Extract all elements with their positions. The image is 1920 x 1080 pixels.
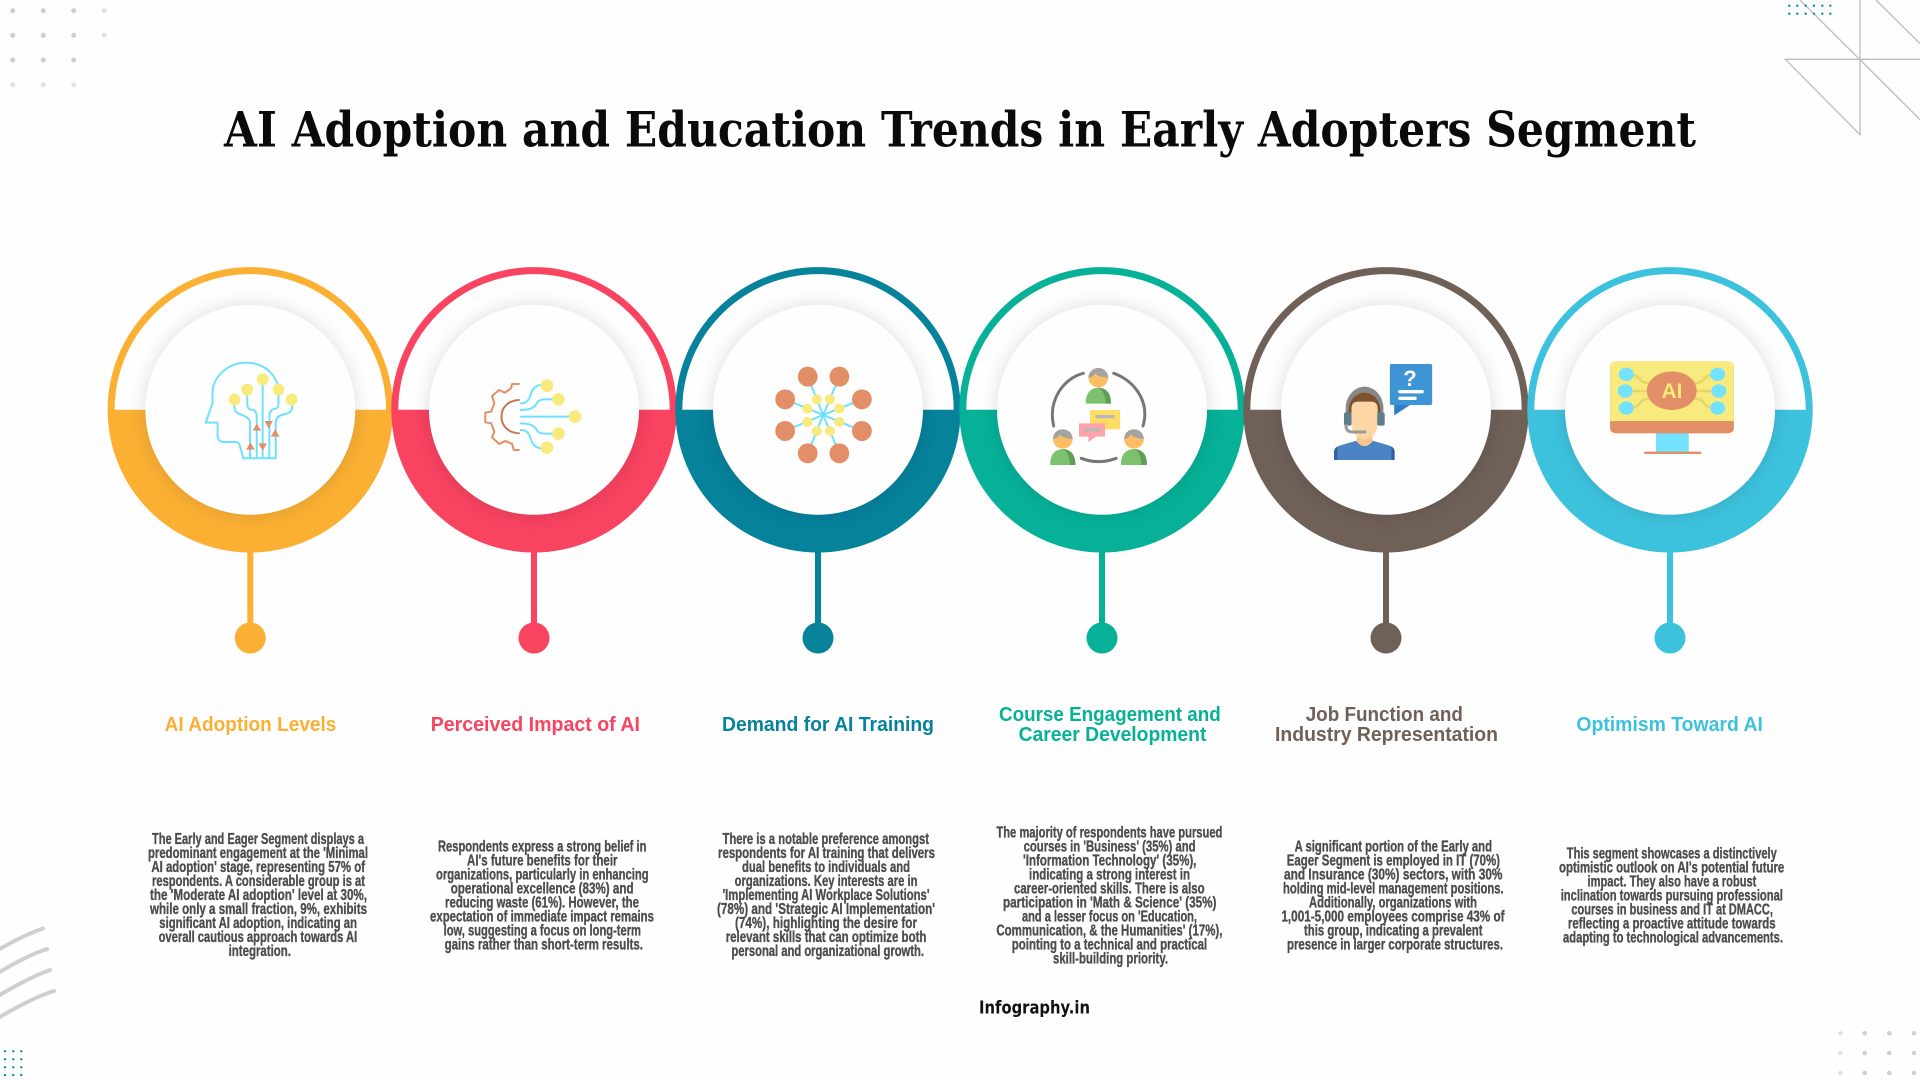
text block: optimism description: This segment showcases a distinctively xyxy=(1567,845,1777,862)
text block: perceived impact description: organizations, particularly in enhancing xyxy=(436,866,649,883)
decoration: bottom-left teal dots xyxy=(4,1050,22,1076)
connector: red stem and dot xyxy=(518,552,550,654)
text block: training demand description: relevant skills that can optimize both xyxy=(726,929,926,946)
text block: perceived impact description: gains rather than short-term results. xyxy=(445,936,643,953)
decoration: bottom-left curved strokes xyxy=(0,928,54,1018)
ring: red xyxy=(391,267,677,552)
ring: teal xyxy=(675,267,961,552)
text block: AI adoption description: The Early and Eager Segment displays a xyxy=(152,831,364,848)
connector: brown stem and dot xyxy=(1370,552,1402,654)
text block: training demand description: (74%), highlighting the desire for xyxy=(735,915,917,932)
text block: AI adoption description: the 'Moderate AI adoption' level at 30%, xyxy=(150,887,367,904)
panel: course engagement and career development xyxy=(959,267,1245,967)
text block: job function description: this group, indicating a prevalent xyxy=(1304,922,1482,939)
heading: Course Engagement and Career Development xyxy=(999,703,1221,746)
heading: Perceived Impact of AI: Perceived Impact of AI xyxy=(431,713,640,736)
text block: training demand description xyxy=(717,831,935,960)
text block: course engagement description: skill-building priority. xyxy=(1053,950,1168,967)
decoration: bottom-right dot grid xyxy=(1838,1031,1916,1075)
panel: demand for AI training xyxy=(675,267,961,960)
text block: training demand description: dual benefits to individuals and xyxy=(742,859,910,876)
text block: AI adoption description xyxy=(148,831,368,960)
text block: job function description xyxy=(1281,838,1505,953)
icon: support agent with question bubble: ? xyxy=(1403,366,1417,391)
panel: optimism toward AI xyxy=(1527,267,1813,946)
text block: job function description: holding mid-level management positions. xyxy=(1283,880,1504,897)
text block: AI adoption description: AI adoption' stage, representing 57% of xyxy=(151,859,366,876)
text block: AI adoption description: significant AI adoption, indicating an xyxy=(159,915,357,932)
text block: job function description: Eager Segment is employed in IT (70%) xyxy=(1287,852,1500,869)
text block: job function description: presence in larger corporate structures. xyxy=(1287,936,1503,953)
decoration: top-left dot grid xyxy=(10,8,107,87)
title: AI Adoption and Education Trends in Early Adopters Segment xyxy=(223,101,1696,159)
heading: Job Function and Industry Representation xyxy=(1275,703,1498,746)
text block: course engagement description: indicating a strong interest in xyxy=(1029,866,1190,883)
text block: course engagement description: career-oriented skills. There is also xyxy=(1014,880,1205,897)
ring: orange xyxy=(108,267,393,552)
text block: optimism description: impact. They also have a robust xyxy=(1588,873,1756,890)
heading: Job Function and Industry Representation: Industry Representation xyxy=(1275,723,1498,746)
text block: course engagement description: 'Information Technology' (35%), xyxy=(1023,852,1196,869)
panel: AI adoption levels xyxy=(108,267,393,960)
text block: optimism description: inclination towards pursuing professional xyxy=(1561,887,1783,904)
text block: perceived impact description: expectation of immediate impact remains xyxy=(430,908,654,925)
text block: training demand description: There is a notable preference amongst xyxy=(722,831,929,848)
text block: training demand description: personal and organizational growth. xyxy=(731,943,924,960)
icon: AI monitor xyxy=(1610,361,1734,454)
text block: perceived impact description: operational excellence (83%) and xyxy=(451,880,634,897)
ring: cyan xyxy=(1527,267,1813,552)
connector: teal stem and dot xyxy=(802,552,834,654)
text block: course engagement description: courses in 'Business' (35%) and xyxy=(1024,838,1196,855)
connector: orange stem and dot xyxy=(235,552,266,654)
text block: course engagement description: pointing to a technical and practical xyxy=(1012,936,1207,953)
text block: perceived impact description xyxy=(430,838,654,953)
icon: gear with network xyxy=(485,379,581,454)
decoration: top-right teal dots xyxy=(1788,4,1832,15)
text block: course engagement description: Communication, & the Humanities' (17%), xyxy=(996,922,1222,939)
icon: three people discussing xyxy=(1050,368,1147,465)
icon: radial network xyxy=(775,367,872,463)
ring: brown xyxy=(1243,267,1529,552)
heading: Course Engagement and Career Development: Career Development xyxy=(1019,723,1207,746)
text block: perceived impact description: AI's future benefits for their xyxy=(467,852,618,869)
icon: support agent with question bubble xyxy=(1334,364,1432,460)
text block: perceived impact description: Respondents express a strong belief in xyxy=(438,838,646,855)
decoration: top-right geometric lines xyxy=(1785,0,1920,135)
text block: training demand description: organizations. Key interests are in xyxy=(735,873,918,890)
ring: green xyxy=(959,267,1245,552)
text block: perceived impact description: low, suggesting a focus on long-term xyxy=(444,922,641,939)
text block: optimism description xyxy=(1559,845,1785,946)
text block: optimism description: optimistic outlook on AI's potential future xyxy=(1559,859,1785,876)
text block: job function description: and Insurance (30%) sectors, with 30% xyxy=(1284,866,1503,883)
heading: Course Engagement and Career Development: Course Engagement and xyxy=(999,703,1221,726)
text block: perceived impact description: reducing waste (61%). However, the xyxy=(445,894,639,911)
text block: optimism description: adapting to technological advancements. xyxy=(1563,929,1783,946)
text block: AI adoption description: while only a small fraction, 9%, exhibits xyxy=(149,901,367,918)
text block: job function description: A significant portion of the Early and xyxy=(1295,838,1492,855)
text block: training demand description: respondents for AI training that delivers xyxy=(718,845,935,862)
icon: AI monitor: AI xyxy=(1662,380,1682,403)
panel: job function and industry representation xyxy=(1243,267,1529,953)
text block: AI adoption description: overall cautious approach towards AI xyxy=(159,929,357,946)
text block: course engagement description xyxy=(996,824,1222,967)
icon: brain circuit head xyxy=(206,363,297,458)
connector: cyan stem and dot xyxy=(1654,552,1686,654)
text block: course engagement description: participation in 'Math & Science' (35%) xyxy=(1003,894,1216,911)
text block: course engagement description: The majority of respondents have pursued xyxy=(996,824,1222,841)
text block: job function description: 1,001-5,000 employees comprise 43% of xyxy=(1281,908,1505,925)
text block: training demand description: 'Implementing AI Workplace Solutions' xyxy=(722,887,930,904)
text block: course engagement description: and a lesser focus on 'Education, xyxy=(1022,908,1197,925)
heading: AI Adoption Levels: AI Adoption Levels xyxy=(165,713,336,736)
text block: optimism description: reflecting a proactive attitude towards xyxy=(1568,915,1776,932)
text block: AI adoption description: predominant engagement at the 'Minimal xyxy=(148,845,368,862)
panel: perceived impact of AI xyxy=(391,267,677,953)
heading: Optimism Toward AI: Optimism Toward AI xyxy=(1576,713,1763,736)
heading: Job Function and Industry Representation: Job Function and xyxy=(1306,703,1463,726)
text block: job function description: Additionally, organizations with xyxy=(1309,894,1477,911)
text block: AI adoption description: integration. xyxy=(229,943,291,960)
brand label: Infography.in xyxy=(979,998,1090,1018)
text block: AI adoption description: respondents. A considerable group is at xyxy=(152,873,365,890)
text block: optimism description: courses in business and IT at DMACC, xyxy=(1571,901,1773,918)
text block: training demand description: (78%) and 'Strategic AI Implementation' xyxy=(717,901,935,918)
connector: green stem and dot xyxy=(1086,552,1118,654)
heading: Demand for AI Training: Demand for AI Training xyxy=(722,713,934,736)
